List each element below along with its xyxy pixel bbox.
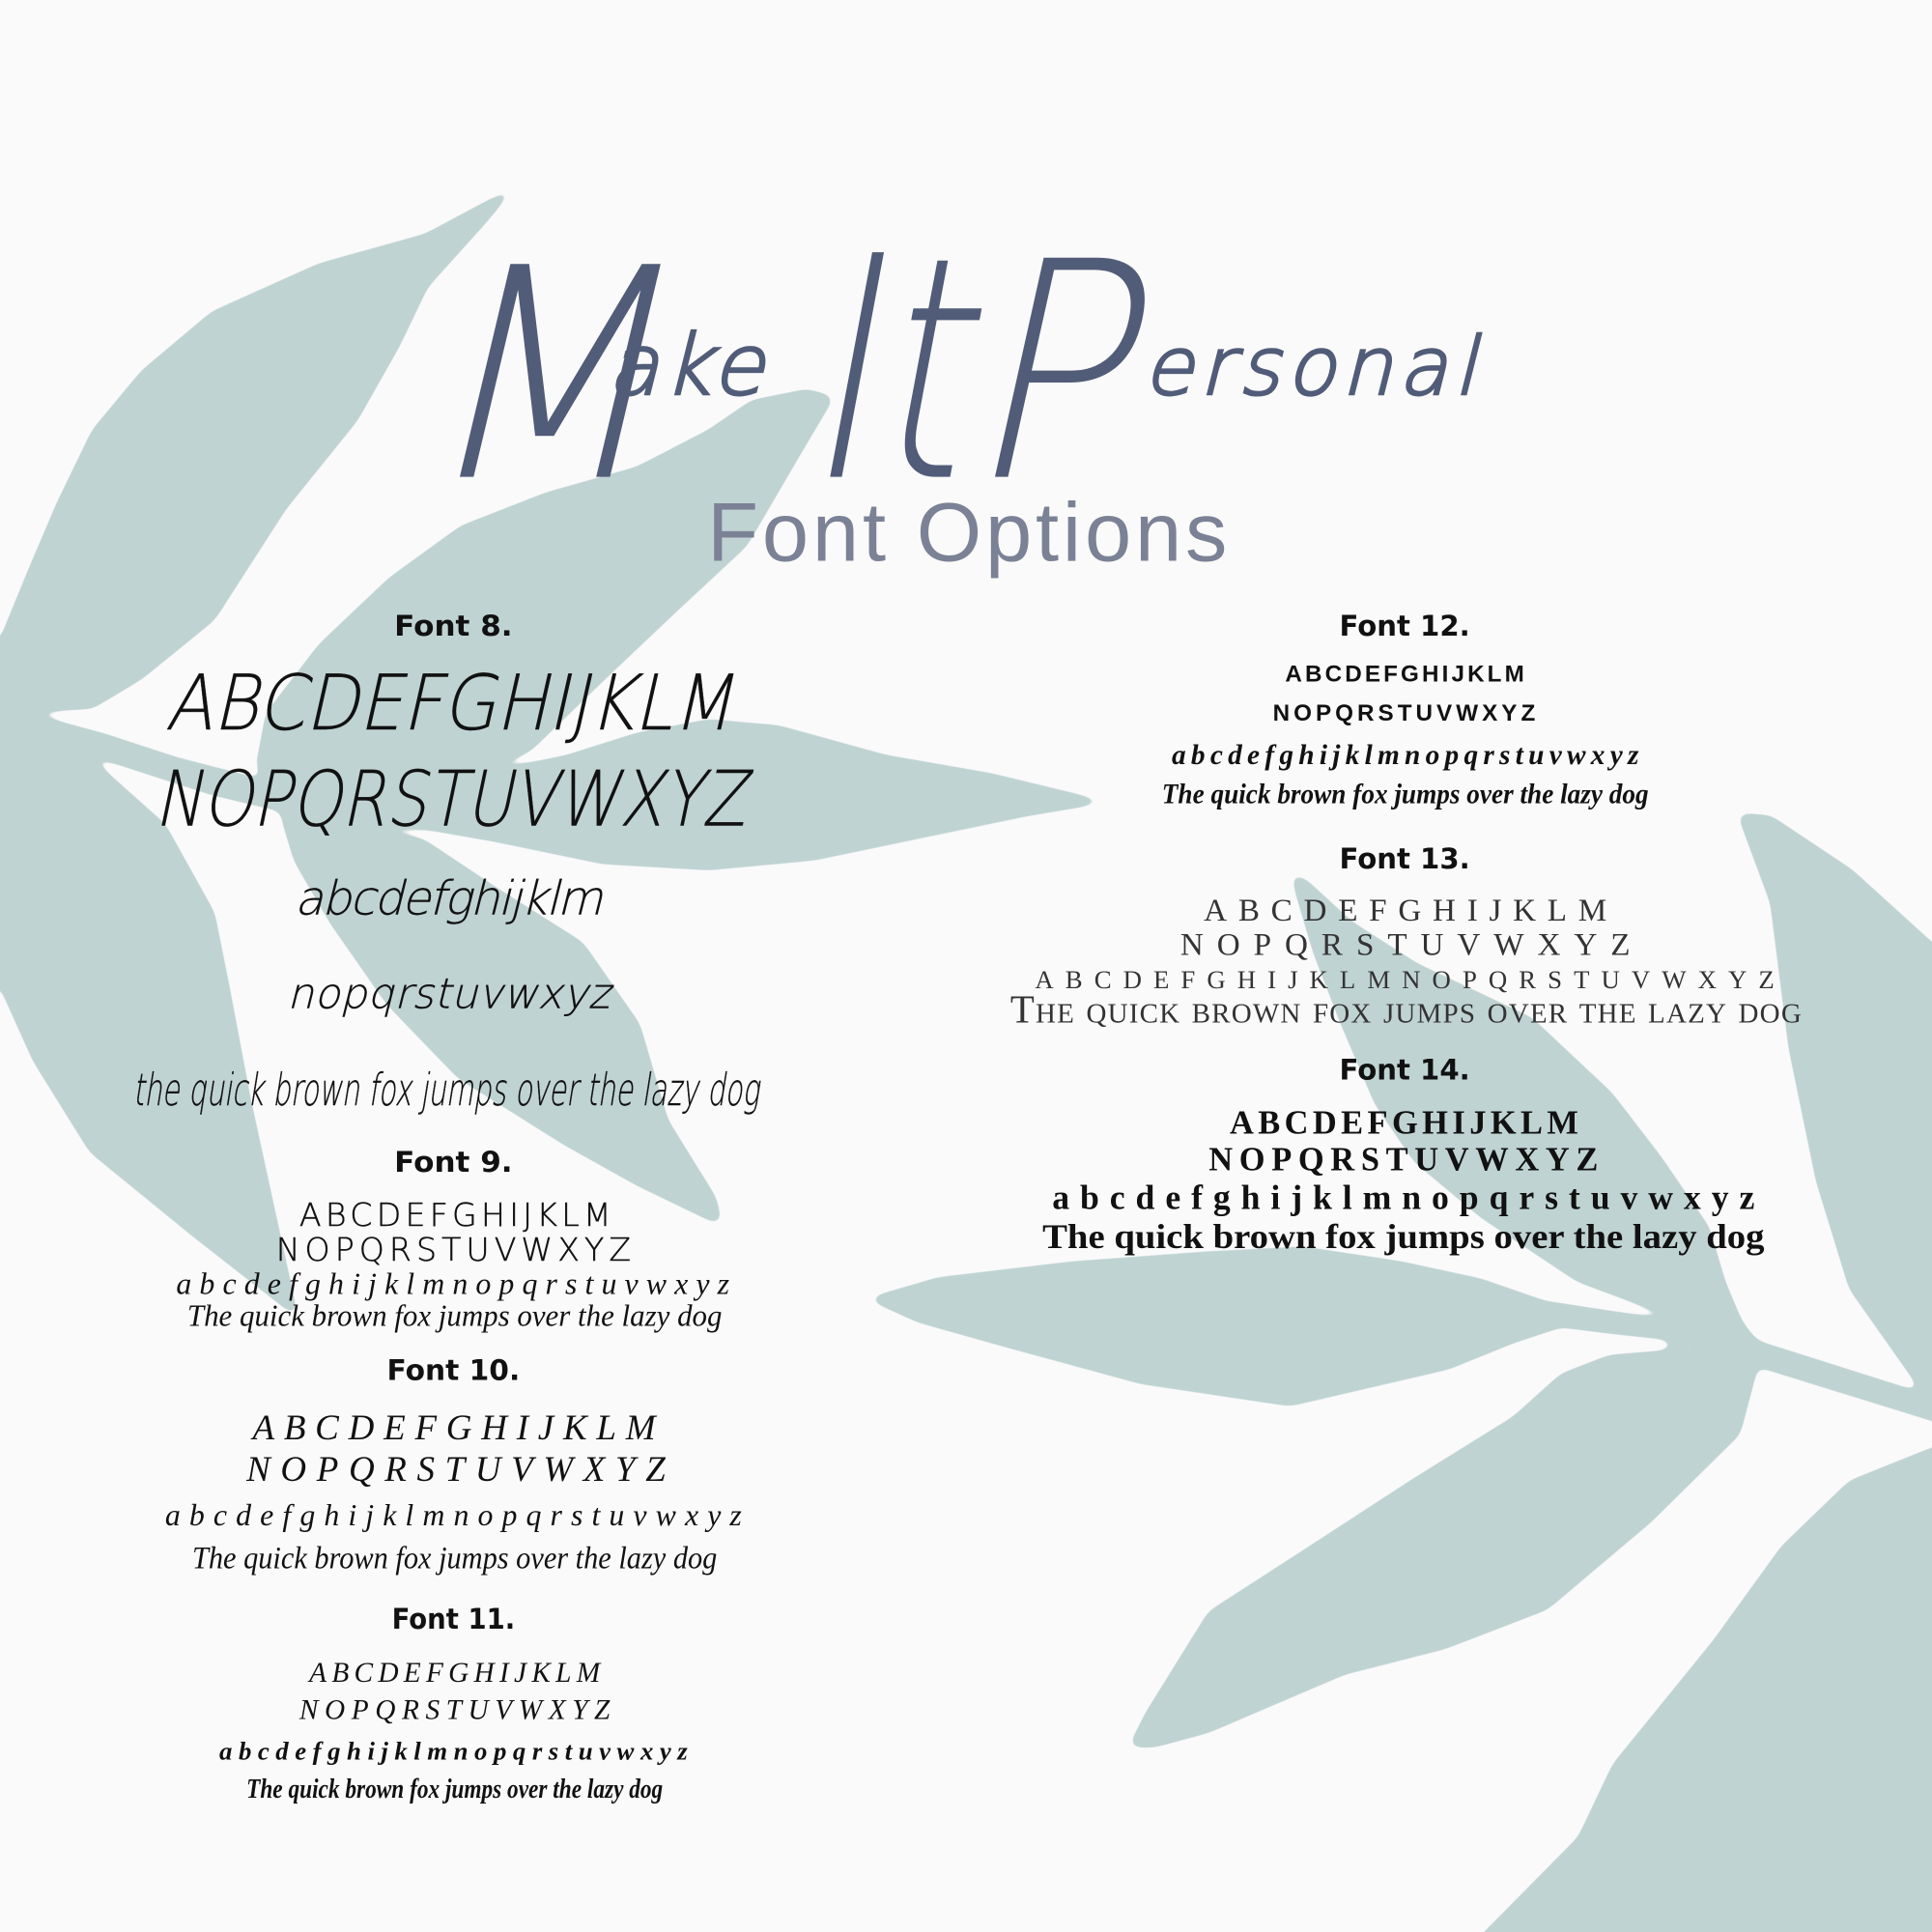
- font sample: Font 13: [1010, 842, 1802, 1032]
- leaf: lower centre: [1128, 1348, 1757, 1747]
- leaf: bottom right: [1476, 1435, 1932, 1932]
- uppercase second row: NOPQRSTUVWXYZ: [154, 755, 754, 844]
- pangram: The quick brown fox jumps over the lazy dog: [1162, 780, 1649, 810]
- title: [415, 191, 1482, 550]
- leaf: long right: [345, 720, 1109, 870]
- font sample: Font 9: [176, 1146, 729, 1332]
- title word: Make: M: [415, 206, 663, 546]
- uppercase second row: NOPQRSTUVWXYZ: [276, 1231, 631, 1268]
- heading: Font 13.: [1339, 842, 1470, 875]
- subtitle: Font Options: [707, 485, 1227, 579]
- uppercase first row: ABCDEFGHIJKLM: [1285, 661, 1524, 687]
- alphabet small caps: ABCDEFGHIJKLMNOPQRSTUVWXYZ: [1035, 965, 1775, 994]
- leaves and stem: upper and left: [0, 185, 518, 1319]
- lowercase: abcdefghijklmnopqrstuvwxyz: [219, 1736, 688, 1765]
- uppercase first row: ABCDEFGHIJKLM: [307, 1658, 602, 1689]
- uppercase second row: NOPQRSTUVWXYZ: [245, 1449, 666, 1489]
- lowercase: abcdefghijklmnopqrstuvwxyz: [1172, 740, 1639, 771]
- pangram: The quick brown fox jumps over the lazy dog: [187, 1298, 722, 1332]
- heading: Font 10.: [387, 1354, 520, 1387]
- lowercase: abcdefghijklmnopqrstuvwxyz: [1052, 1178, 1754, 1216]
- lowercase: abcdefghijklmnopqrstuvwxyz: [165, 1498, 742, 1532]
- uppercase second row: NOPQRSTUVWXYZ: [1273, 700, 1535, 726]
- font sample: Font 12: [1162, 610, 1649, 810]
- uppercase second row: NOPQRSTUVWXYZ: [1180, 927, 1631, 963]
- leaf: centre: [1292, 872, 1753, 1337]
- title word: Personal: [962, 199, 1482, 549]
- leaf: top right: [1737, 813, 1932, 1410]
- leaf: left: [867, 1247, 1757, 1406]
- heading: Font 9.: [394, 1146, 513, 1179]
- uppercase first row: ABCDEFGHIJKLM: [1204, 893, 1606, 928]
- title word: Personal: P: [962, 199, 1151, 549]
- uppercase first row: ABCDEFGHIJKLM: [1230, 1104, 1578, 1141]
- lowercase first row: abcdefghijklm: [295, 871, 604, 925]
- uppercase first row: ABCDEFGHIJKLM: [165, 659, 733, 748]
- title word: Make: ake: [608, 317, 767, 414]
- stem: [1663, 1331, 1932, 1441]
- pangram: The quick brown fox jumps over the lazy dog: [192, 1541, 717, 1577]
- uppercase second row: NOPQRSTUVWXYZ: [1208, 1142, 1598, 1179]
- leaf branch: top left: [0, 185, 1109, 1319]
- uppercase second row: NOPQRSTUVWXYZ: [298, 1694, 611, 1725]
- pangram: The quick brown fox jumps over the lazy dog: [1010, 988, 1802, 1032]
- title word: It: It: [802, 191, 982, 550]
- font sample: Font 11: [219, 1603, 688, 1804]
- uppercase first row: ABCDEFGHIJKLM: [299, 1196, 611, 1234]
- pangram: the quick brown fox jumps over the lazy dog: [133, 1064, 761, 1116]
- font sample: Font 8: [133, 610, 761, 1116]
- font sample: Font 10: [165, 1354, 742, 1577]
- heading: Font 14.: [1339, 1053, 1470, 1086]
- title word: Personal: ersonal: [1144, 320, 1482, 413]
- pangram: The quick brown fox jumps over the lazy dog: [1042, 1217, 1765, 1256]
- leaf branch: bottom right: [867, 813, 1932, 1932]
- uppercase first row: ABCDEFGHIJKLM: [249, 1407, 658, 1447]
- heading: Font 11.: [392, 1603, 515, 1635]
- leaf: upper centre: [256, 389, 835, 823]
- lowercase: abcdefghijklmnopqrstuvwxyz: [176, 1266, 729, 1300]
- heading: Font 12.: [1339, 610, 1470, 642]
- title word: Make: [415, 206, 767, 546]
- heading: Font 8.: [394, 610, 513, 642]
- font sample: Font 14: [1042, 1053, 1765, 1256]
- pangram: The quick brown fox jumps over the lazy dog: [246, 1775, 663, 1804]
- lowercase second row: nopqrstuvwxyz: [287, 970, 614, 1018]
- leaf: lower centre: [281, 817, 722, 1225]
